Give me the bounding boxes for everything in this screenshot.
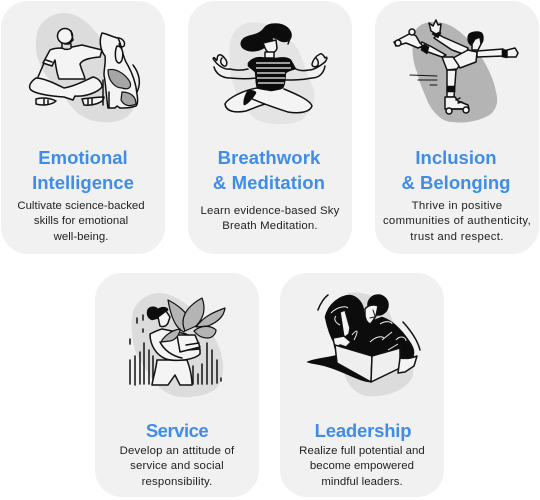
heading: breathwork and meditation	[213, 147, 325, 193]
panel: inclusion and belonging	[375, 1, 539, 254]
panel: emotional intelligence	[1, 1, 165, 254]
heading: inclusion and belonging	[402, 147, 510, 193]
panel: service	[95, 273, 259, 497]
text: emotional intelligence description	[17, 200, 145, 243]
text: breathwork description	[201, 205, 340, 232]
text: inclusion description: communities of authenticity,	[383, 215, 531, 227]
text: service description: responsibility.	[142, 476, 212, 488]
text: emotional intelligence description: skills for emotional	[34, 215, 128, 227]
text: service description	[120, 445, 234, 488]
icon: person emerging from box	[307, 293, 420, 396]
text: service description: service and social	[130, 460, 224, 472]
heading: inclusion and belonging: & Belonging	[402, 172, 510, 193]
text: inclusion description: trust and respect.	[410, 231, 504, 243]
text: breathwork description: Learn evidence-based Sky	[201, 205, 339, 217]
text: leadership description: Realize full potential and	[299, 445, 425, 457]
text: breathwork description: Breath Meditation.	[222, 220, 318, 232]
heading: emotional intelligence: Intelligence	[32, 172, 134, 193]
panel: breathwork and meditation	[188, 1, 352, 254]
text: leadership description: mindful leaders.	[321, 476, 403, 488]
heading: breathwork and meditation: Breathwork	[218, 147, 320, 168]
heading: leadership: Leadership	[315, 420, 411, 441]
heading: breathwork and meditation: & Meditation	[213, 172, 325, 193]
panel: leadership	[280, 273, 444, 497]
icon: man sitting with dog	[30, 13, 139, 122]
text: leadership description: become empowered	[310, 460, 414, 472]
heading: emotional intelligence: Emotional	[38, 147, 128, 168]
heading: service: Service	[146, 420, 208, 441]
icon: roller skater	[394, 20, 518, 123]
text: inclusion description	[383, 200, 531, 243]
text: emotional intelligence description: well-being.	[54, 231, 108, 243]
text: emotional intelligence description: Cultivate science-backed	[17, 200, 145, 212]
icon: woman holding plant	[130, 293, 225, 397]
icon: woman meditating	[213, 22, 327, 124]
text: service description: Develop an attitude of	[120, 445, 234, 457]
heading: emotional intelligence	[32, 147, 134, 193]
heading: inclusion and belonging: Inclusion	[415, 147, 497, 168]
text: inclusion description: Thrive in positive	[412, 200, 502, 212]
text: leadership description	[299, 445, 425, 488]
